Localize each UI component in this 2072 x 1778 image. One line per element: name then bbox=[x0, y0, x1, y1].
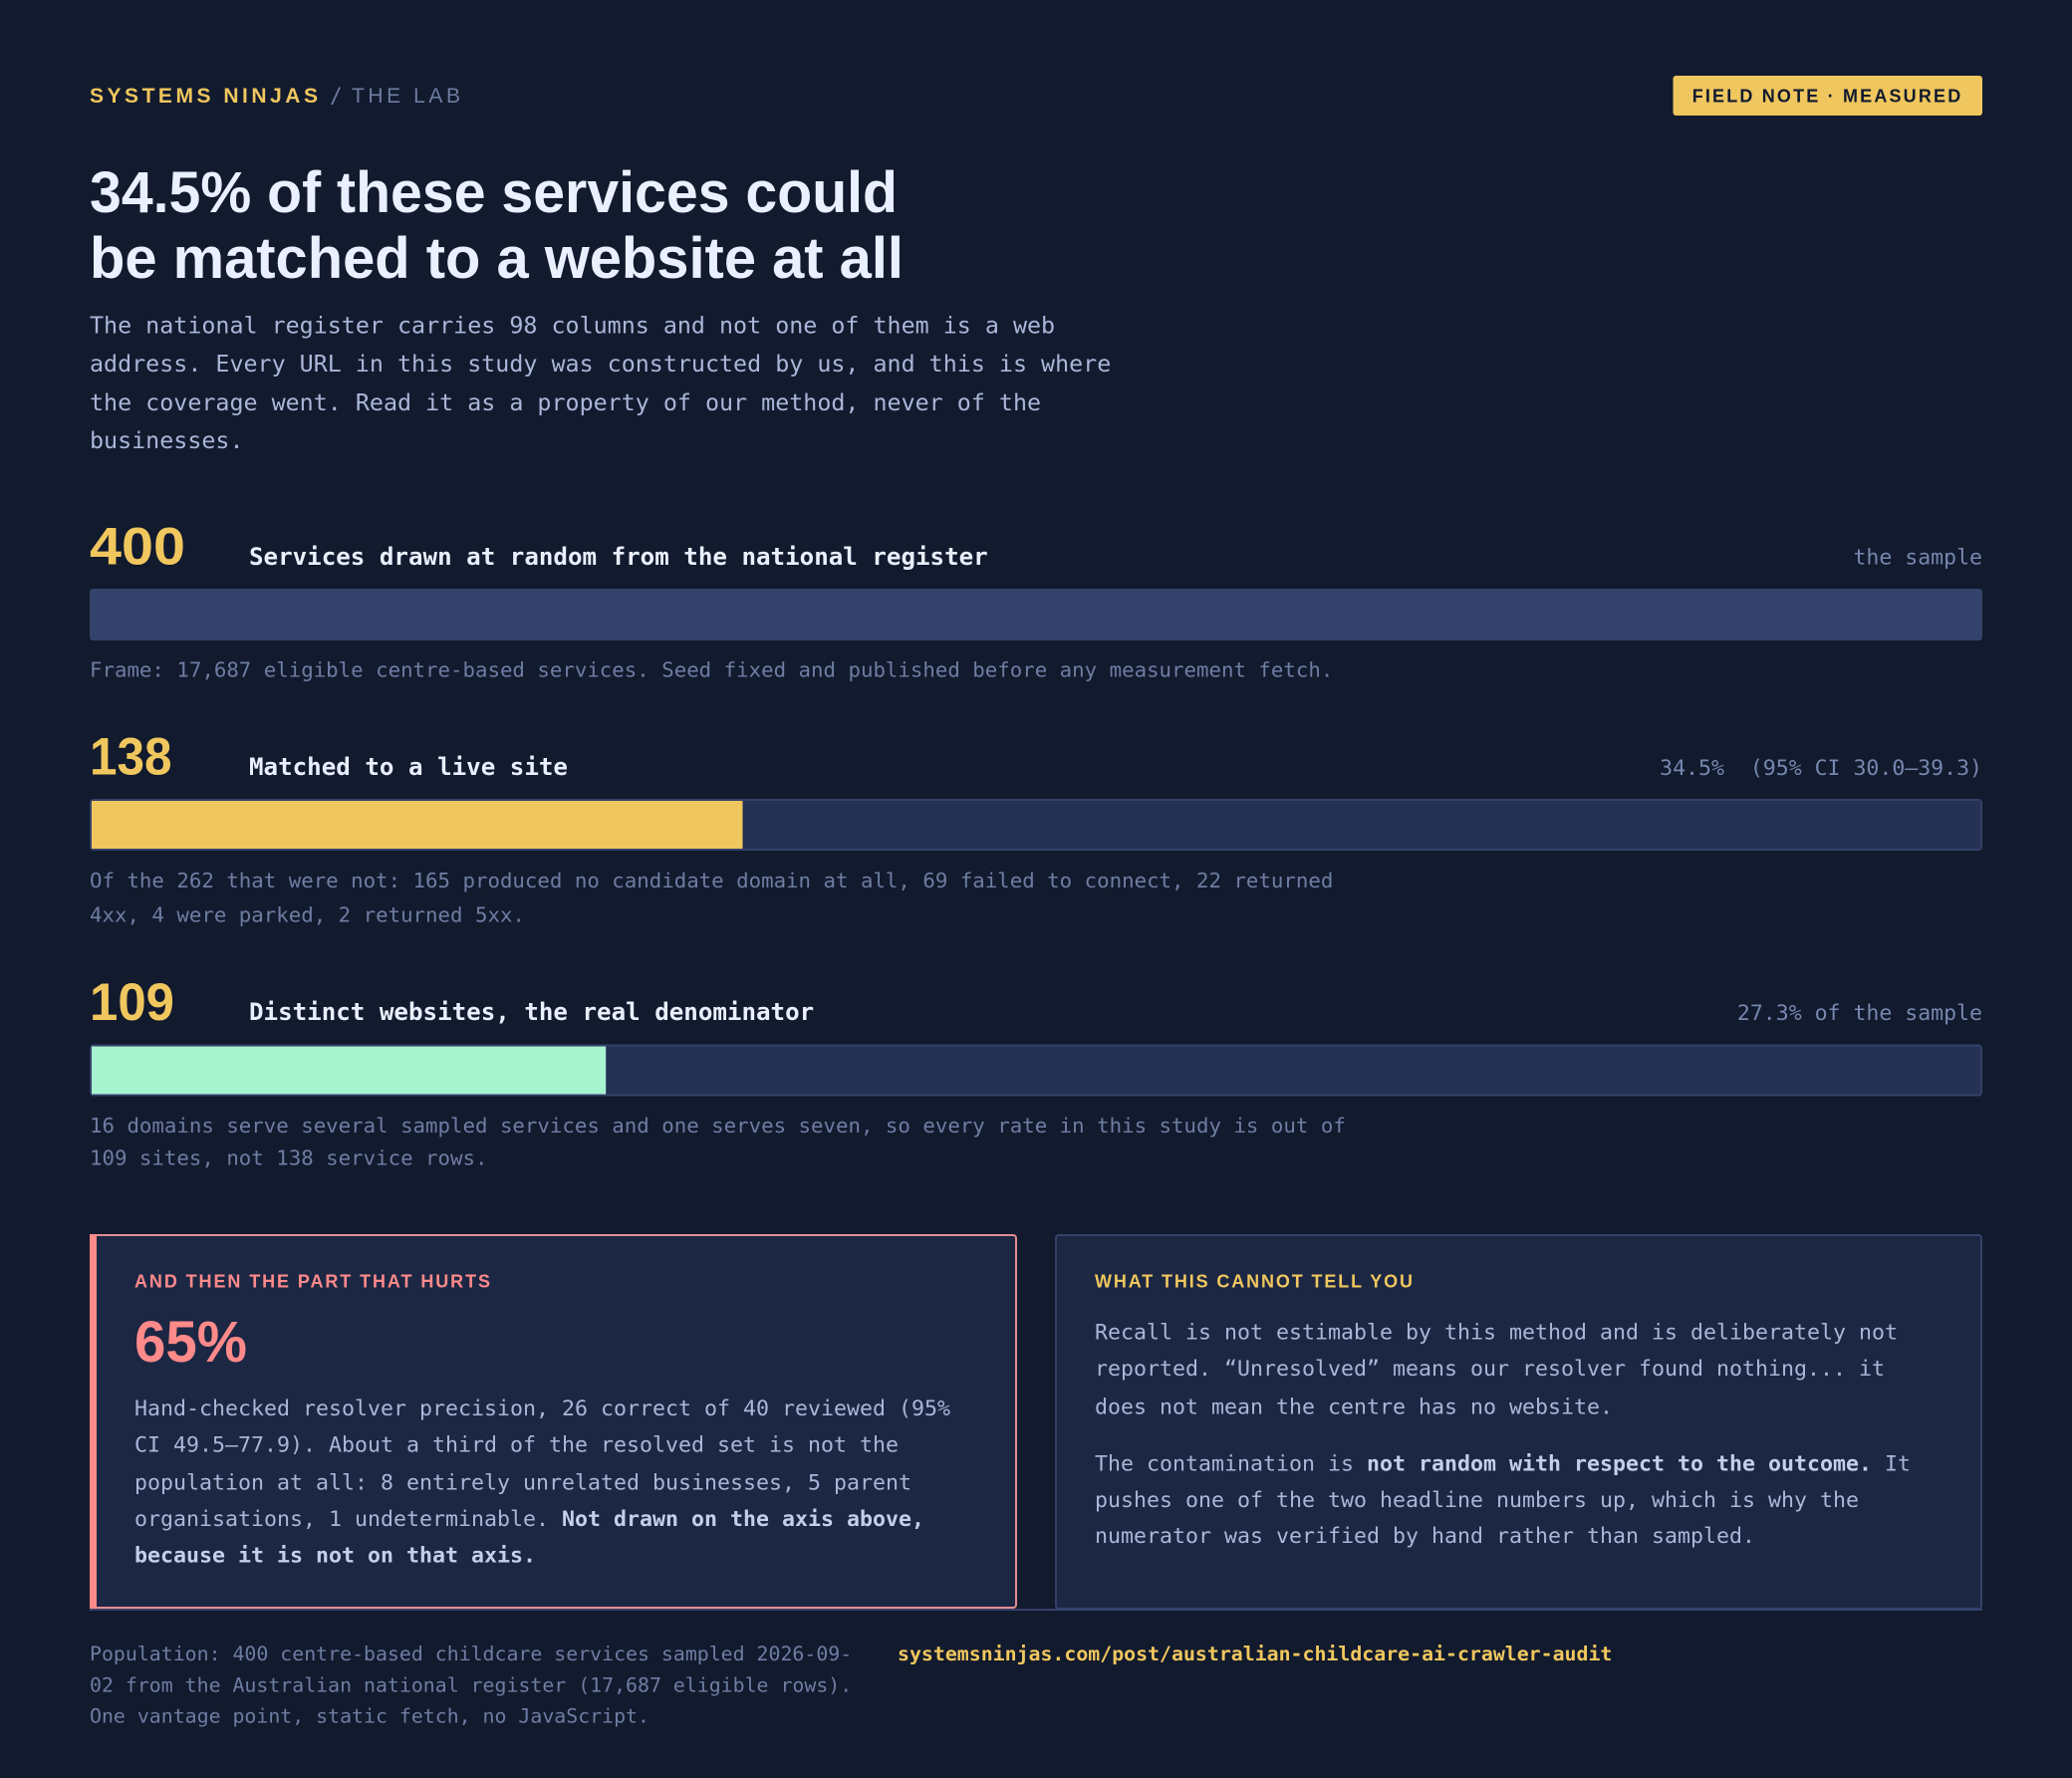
row: 400 sample bbox=[90, 518, 1982, 681]
note: frame: Frame: 17,687 eligible centre-based services. Seed fixed and published before any measurement fetch. bbox=[90, 657, 1333, 681]
note: failures: 4xx, 4 were parked, 2 returned 5xx. bbox=[90, 902, 525, 926]
number: 109: 109 bbox=[90, 973, 174, 1032]
body text: CI 49.5–77.9). About a third of the resolved set is not the bbox=[134, 1432, 899, 1458]
paragraph: recall: reported. “Unresolved” means our resolver found nothing... it bbox=[1095, 1357, 1885, 1382]
bar: matched share bbox=[91, 800, 1981, 850]
title: be matched to a website at all bbox=[90, 226, 904, 291]
intro paragraph: businesses. bbox=[90, 426, 243, 454]
intro paragraph: address. Every URL in this study was constructed by us, and this is where bbox=[90, 350, 1111, 378]
footer: population note: 02 from the Australian national register (17,687 eligible rows). bbox=[90, 1673, 852, 1696]
paragraph: contamination: numerator was verified by hand rather than sampled. bbox=[1095, 1524, 1755, 1549]
brand line: / bbox=[330, 84, 343, 108]
paragraph: recall bbox=[1095, 1321, 1898, 1420]
footer: population note bbox=[90, 1643, 852, 1727]
label: distinct websites: Distinct websites, the real denominator bbox=[249, 998, 814, 1026]
label: matched: Matched to a live site bbox=[249, 753, 568, 781]
body text: organisations, 1 undeterminable. Not drawn on the axis above, bbox=[134, 1507, 924, 1532]
paragraph: recall: does not mean the centre has no website. bbox=[1095, 1395, 1613, 1420]
note: failures: Of the 262 that were not: 165 produced no candidate domain at all, 69 failed to connect, 22 returned bbox=[90, 869, 1333, 892]
note: domains: 16 domains serve several sampled services and one serves seven, so every rate in this study is out of bbox=[90, 1114, 1346, 1138]
note: failures bbox=[90, 869, 1333, 926]
panel: what this cannot tell you bbox=[1056, 1235, 1981, 1609]
intro paragraph: The national register carries 98 columns and not one of them is a web bbox=[90, 311, 1055, 339]
bar: full sample bbox=[90, 589, 1982, 640]
big number: 65%: 65% bbox=[134, 1310, 247, 1375]
number: 138: 138 bbox=[90, 728, 171, 787]
body text: population at all: 8 entirely unrelated businesses, 5 parent bbox=[134, 1470, 911, 1496]
paragraph: contamination: The contamination is not random with respect to the outcome. It bbox=[1095, 1452, 1911, 1476]
note: domains: 109 sites, not 138 service rows. bbox=[90, 1146, 487, 1170]
annotation: the sample: the sample bbox=[1853, 546, 1982, 570]
brand line: THE LAB bbox=[352, 85, 460, 108]
label: services drawn: Services drawn at random from the national register bbox=[249, 543, 988, 571]
title bbox=[90, 160, 904, 291]
badge: field note: FIELD NOTE · MEASURED bbox=[1692, 86, 1960, 106]
note: domains bbox=[90, 1114, 1346, 1170]
intro paragraph bbox=[90, 311, 1111, 454]
panel: the part that hurts bbox=[90, 1234, 1016, 1609]
body text bbox=[134, 1397, 950, 1568]
body text: because it is not on that axis. bbox=[134, 1544, 536, 1568]
badge: field note bbox=[1674, 76, 1982, 116]
eyebrow: WHAT THIS CANNOT TELL YOU bbox=[1095, 1272, 1413, 1292]
title: 34.5% of these services could bbox=[90, 160, 898, 225]
body text: Hand-checked resolver precision, 26 correct of 40 reviewed (95% bbox=[134, 1397, 950, 1421]
eyebrow: AND THEN THE PART THAT HURTS bbox=[134, 1272, 490, 1292]
paragraph: recall: Recall is not estimable by this method and is deliberately not bbox=[1095, 1321, 1898, 1345]
row: 138 matched bbox=[90, 728, 1982, 926]
footer: population note: One vantage point, static fetch, no JavaScript. bbox=[90, 1705, 649, 1727]
annotation: percent of sample: 27.3% of the sample bbox=[1737, 1001, 1982, 1026]
bar: distinct share bbox=[91, 1046, 1981, 1096]
intro paragraph: the coverage went. Read it as a property of our method, never of the bbox=[90, 388, 1041, 416]
brand line bbox=[90, 84, 460, 108]
footer: population note: Population: 400 centre-based childcare services sampled 2026-09- bbox=[90, 1643, 852, 1665]
brand line: SYSTEMS NINJAS bbox=[90, 85, 318, 108]
paragraph: contamination bbox=[1095, 1452, 1911, 1549]
number: 400: 400 bbox=[90, 518, 185, 577]
footer: source link: systemsninjas.com/post/australian-childcare-ai-crawler-audit bbox=[898, 1643, 1612, 1665]
annotation: confidence interval: 34.5% (95% CI 30.0–39.3) bbox=[1660, 756, 1982, 781]
paragraph: contamination: pushes one of the two headline numbers up, which is why the bbox=[1095, 1488, 1859, 1513]
row: 109 distinct bbox=[90, 973, 1982, 1170]
